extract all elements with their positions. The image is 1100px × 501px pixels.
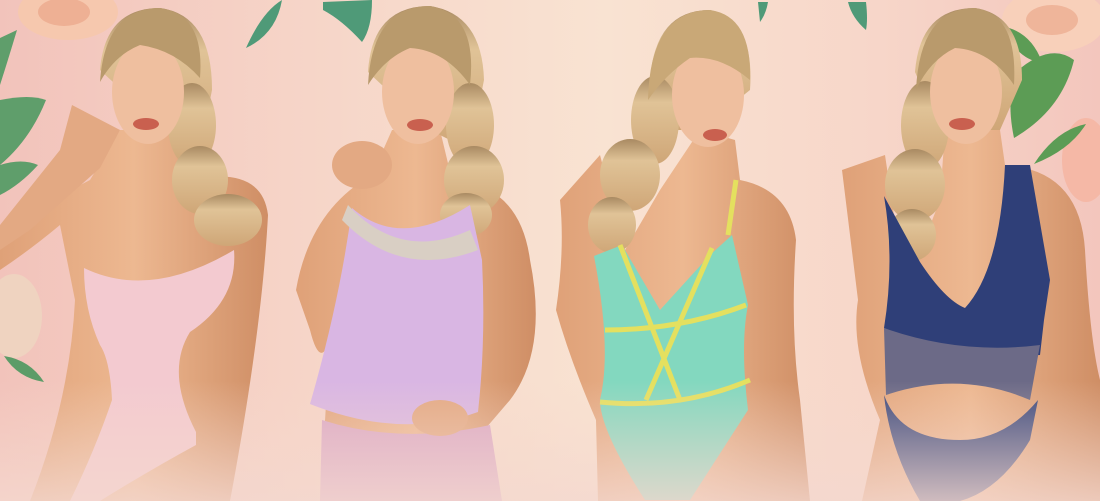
hair top <box>648 10 750 100</box>
flower: left edge <box>0 274 42 358</box>
figure 3: mint garment with yellow trim <box>556 10 810 501</box>
flower: top right <box>1002 0 1100 52</box>
satin bottoms <box>320 420 502 501</box>
leaves: lower edges <box>4 255 1100 490</box>
yellow trim <box>600 180 750 404</box>
hand <box>412 400 468 436</box>
hair top <box>916 8 1014 90</box>
hair top <box>100 8 200 82</box>
lips <box>949 118 975 130</box>
torso and arms <box>842 130 1100 501</box>
torso and arms <box>296 130 536 501</box>
torso and arms <box>0 130 268 501</box>
flower: right edge <box>1062 118 1100 202</box>
lower briefs <box>884 395 1038 501</box>
face <box>112 40 184 144</box>
leaves: top left <box>0 30 46 195</box>
face <box>672 43 744 147</box>
hair top <box>368 6 471 85</box>
figure 2: lavender satin camisole <box>296 6 536 501</box>
upper hand <box>332 141 392 189</box>
flower: top left <box>18 0 118 40</box>
figure 4: navy lace garment <box>842 8 1100 501</box>
leaves: top centre <box>246 0 867 48</box>
lace trim <box>342 205 478 260</box>
leaves: top right <box>1000 26 1086 164</box>
camisole <box>310 205 483 424</box>
lips <box>133 118 159 130</box>
hair <box>885 8 1022 261</box>
hair <box>588 10 750 253</box>
raised arm <box>0 105 120 250</box>
lace top <box>884 165 1050 356</box>
hair <box>100 8 262 246</box>
garment <box>70 250 234 501</box>
lips <box>703 129 727 141</box>
torso and arms <box>556 130 810 501</box>
face <box>382 40 454 144</box>
face <box>930 40 1002 144</box>
lips <box>407 119 433 131</box>
figure 1: pink lace garment <box>0 8 268 501</box>
bodysuit <box>594 235 748 500</box>
hair <box>368 6 504 237</box>
sheer waist panel <box>884 328 1040 400</box>
